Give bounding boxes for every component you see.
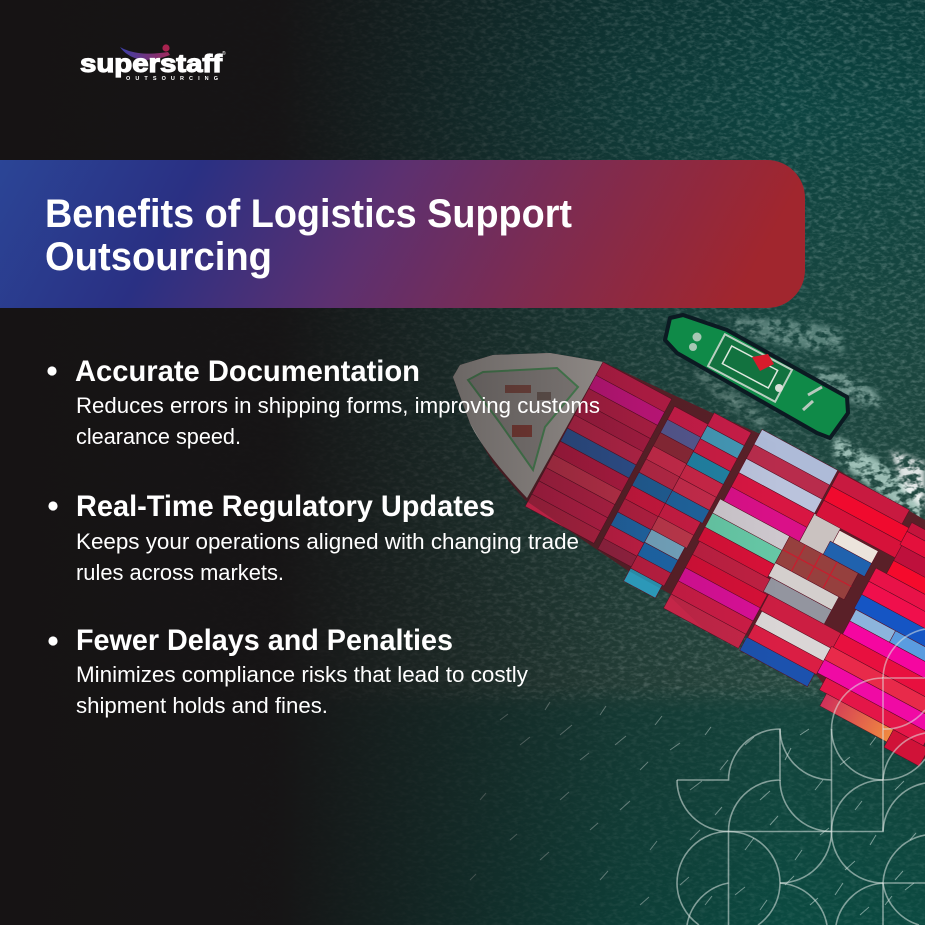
benefit 2: real-time regulatory updates [48,490,579,585]
benefit 1: accurate documentation: clearance speed. [76,424,241,449]
benefit 3: fewer delays and penalties: Minimizes compliance risks that lead to costly [76,662,529,687]
benefit 3: fewer delays and penalties [48,624,529,718]
benefit 1: accurate documentation: Accurate Documentation [75,355,420,388]
cargo containers [505,348,925,766]
benefit 2: real-time regulatory updates: Keeps your operations aligned with changing trade [76,529,579,554]
logo: superstaff outsourcing [80,44,226,82]
title banner [0,160,805,308]
logo: superstaff outsourcing: ® [222,50,226,57]
bay 3 [662,428,838,650]
benefit 2: real-time regulatory updates: rules across markets. [76,560,284,585]
logo: superstaff outsourcing: superstaff [80,50,223,78]
bay 5 [801,517,925,766]
decorative geometric line pattern [677,629,925,925]
tugboat [665,315,848,438]
benefit 1: accurate documentation: Reduces errors in shipping forms, improving customs [76,393,600,418]
ship hull [453,353,925,760]
container ship [453,348,925,766]
central hatch [761,508,880,630]
benefit 2: real-time regulatory updates: Real-Time Regulatory Updates [76,490,495,523]
bay 4 [739,470,918,694]
title: Outsourcing [45,235,272,279]
benefit 1: accurate documentation [47,355,600,449]
tugboat wake [695,318,925,525]
title [45,192,572,279]
logo: superstaff outsourcing: OUTSOURCING [126,76,218,82]
bay 2 [590,395,751,601]
benefit 3: fewer delays and penalties: Fewer Delays and Penalties [76,624,453,657]
benefit 3: fewer delays and penalties: shipment holds and fines. [76,693,328,718]
bay 1 [525,362,672,543]
title: Benefits of Logistics Support [45,192,572,236]
ship shading [453,353,780,702]
ship bow deck [453,353,603,498]
water flecks [470,702,916,915]
